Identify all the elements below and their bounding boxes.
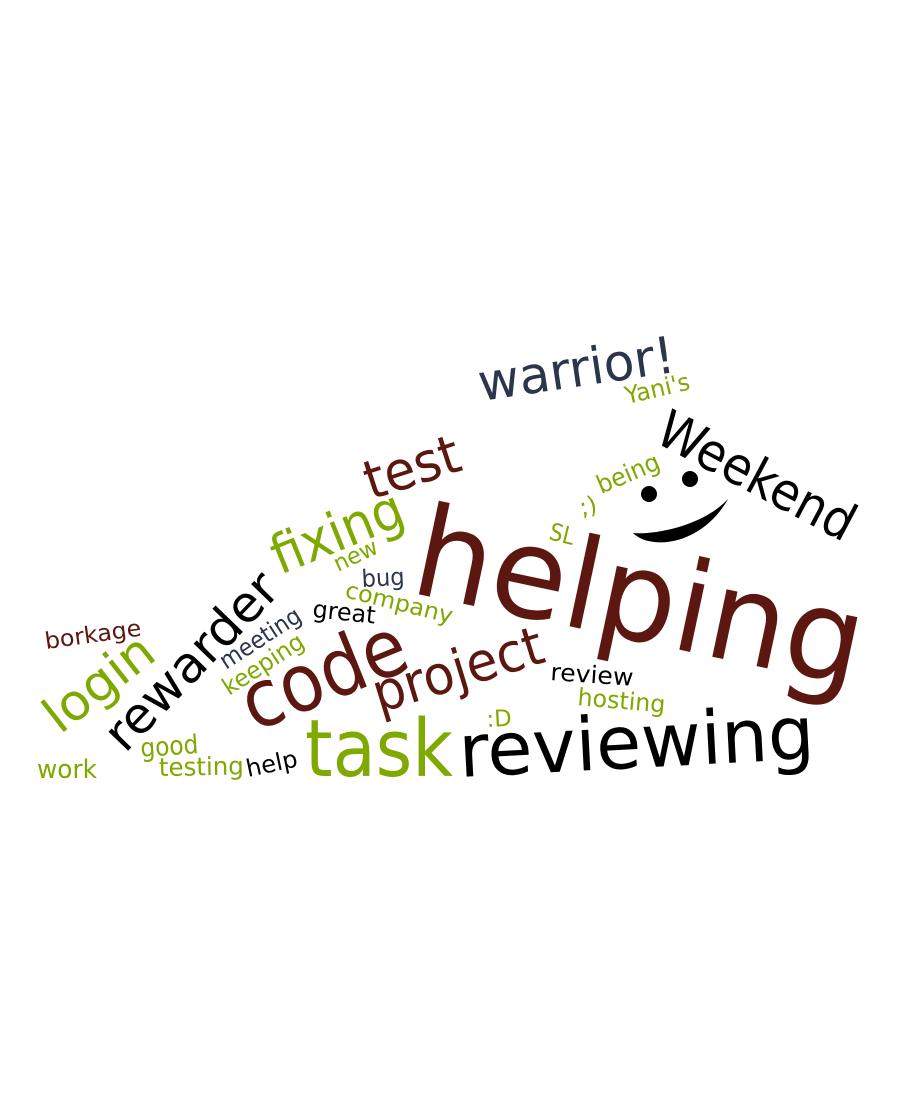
word: great: great [311,595,377,630]
smiley right eye [682,471,698,487]
word: new: new [330,534,382,577]
word: review: review [550,658,634,692]
word: good: good [139,730,199,764]
word: company: company [343,578,456,629]
word: help: help [243,745,300,783]
word: rewarder: rewarder [92,559,291,762]
word: testing: testing [159,752,244,782]
word: bug: bug [361,563,405,593]
smiley mouth [633,499,728,542]
word: helping: helping [402,478,878,716]
word: being: being [592,447,664,500]
word: code: code [226,599,421,750]
word: hosting: hosting [576,683,667,719]
word: ;): ;) [576,490,600,522]
word: SL: SL [547,518,578,551]
word: Weekend: Weekend [647,400,866,554]
word: reviewing: reviewing [456,690,816,795]
word: work: work [37,755,97,785]
word: borkage: borkage [43,616,143,655]
smiley left eye [641,486,657,502]
word: test: test [356,422,468,512]
word: keeping: keeping [217,627,309,701]
word: Yani's: Yani's [621,368,693,410]
word: project: project [364,614,551,725]
word: meeting: meeting [214,601,306,675]
word: task: task [305,703,453,795]
icon: smiley [633,471,728,542]
word: fixing: fixing [261,477,413,587]
word: login: login [32,622,166,744]
word: :D: :D [486,706,512,733]
word: warrior!: warrior! [474,326,679,414]
